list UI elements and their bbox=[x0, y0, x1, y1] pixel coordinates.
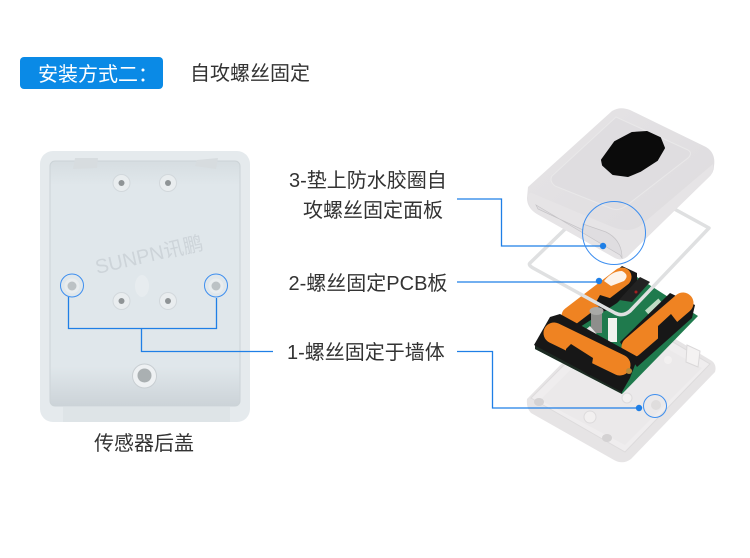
panel: exploded sensor assembly bbox=[527, 108, 716, 462]
callout 3: gasket and self-tapping screw to panel bbox=[289, 169, 646, 264]
lid dark sensor window bbox=[602, 132, 664, 176]
top clips bbox=[73, 158, 218, 169]
caption: 传感器后盖: 传感器后盖 bbox=[94, 432, 194, 455]
callout 2: screw to PCB bbox=[288, 272, 602, 295]
lid edge recess bbox=[536, 205, 622, 258]
back battery bbox=[571, 277, 622, 316]
callout 1: screw to wall: 1-螺丝固定于墙体 bbox=[287, 341, 445, 364]
bottom shell bbox=[527, 305, 716, 462]
watermark logo: SUNPN讯鹏 bbox=[93, 232, 205, 279]
right battery bbox=[632, 303, 683, 347]
lid inset panel bbox=[551, 117, 690, 210]
back battery holder bbox=[562, 266, 637, 327]
lid body bbox=[527, 108, 714, 259]
lower screw posts bbox=[113, 292, 176, 310]
right mounting hole bbox=[208, 278, 224, 294]
callout 3: gasket and self-tapping screw to panel: 攻螺丝固定面板 bbox=[303, 199, 443, 222]
center bump bbox=[135, 275, 149, 297]
lid front face bbox=[528, 164, 713, 259]
cover inner floor bbox=[50, 161, 240, 406]
left mounting hole bbox=[64, 278, 80, 294]
circuit board bbox=[535, 277, 698, 394]
bottom mounting hole bbox=[132, 364, 156, 388]
heading badge: 安装方式二 bbox=[20, 57, 163, 89]
front battery holder bbox=[534, 314, 638, 392]
top lid bbox=[527, 108, 714, 259]
callout 3: gasket and self-tapping screw to panel: 3-垫上防水胶圈自 bbox=[289, 169, 447, 192]
sensor blocks on board bbox=[619, 277, 650, 302]
heading: 自攻螺丝固定: 自攻螺丝固定 bbox=[190, 62, 310, 85]
heading badge: 安装方式二: 安装方式二： bbox=[38, 63, 158, 86]
cover outer shell bbox=[40, 151, 250, 422]
callout 1: screw to wall bbox=[287, 341, 666, 418]
callout 2: screw to PCB: 2-螺丝固定PCB板 bbox=[288, 272, 447, 295]
upper screw posts bbox=[113, 174, 176, 192]
callout: back cover wall mounting holes bbox=[60, 274, 273, 352]
right battery holder bbox=[620, 293, 695, 367]
gasket ring bbox=[529, 178, 709, 315]
front battery bbox=[554, 333, 620, 365]
bottom clip band bbox=[63, 407, 230, 422]
battery and circuit board module bbox=[534, 266, 698, 394]
panel: sensor back cover bbox=[40, 151, 250, 422]
spring and mounting post bbox=[591, 310, 602, 333]
